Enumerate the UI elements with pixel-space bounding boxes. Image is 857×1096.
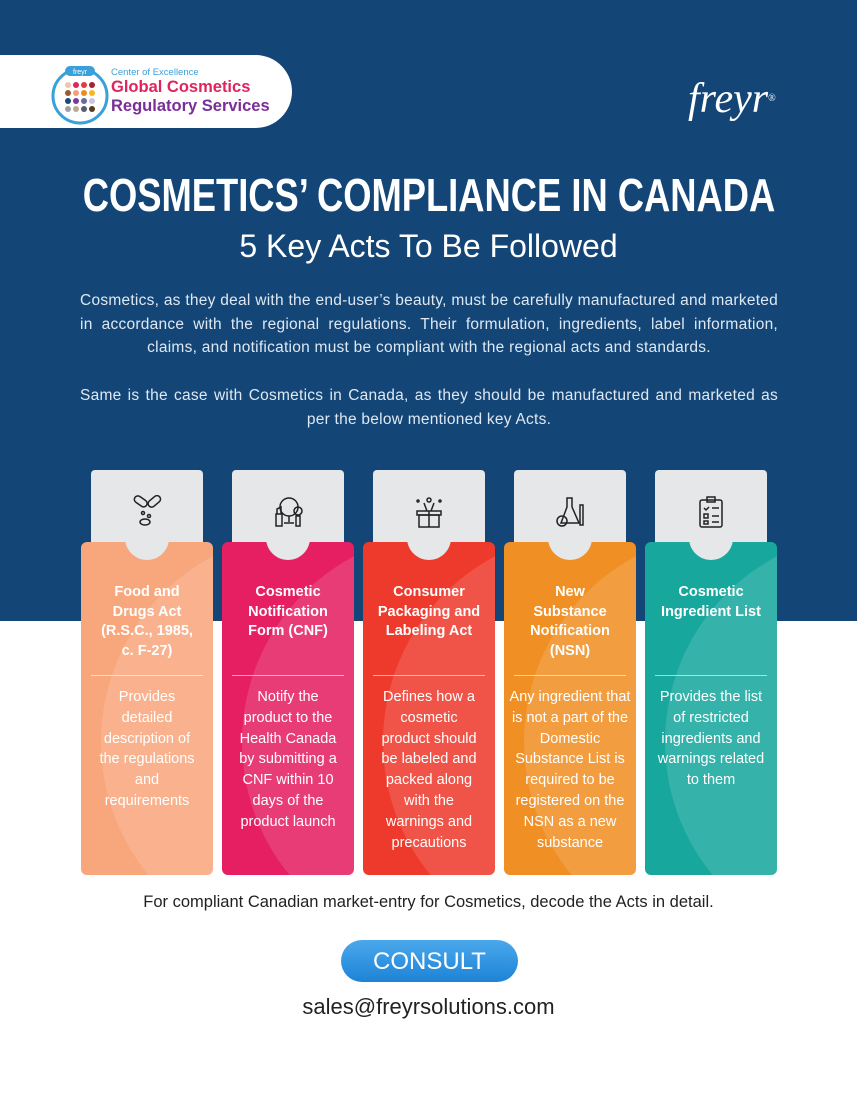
consult button: CONSULT (373, 948, 486, 975)
card 4: New Substance Notification (NSN) (530, 584, 610, 659)
card 4: Any ingredient that is not a part of the Domestic Substance List is required to be registered on the NSN as a new substance (510, 689, 630, 851)
email: sales@freyrsolutions.com (302, 994, 555, 1019)
card 1 (81, 542, 213, 875)
freyr logo: freyr® (688, 76, 776, 122)
card 2 (222, 542, 354, 875)
card 2: Notify the product to the Health Canada by submitting a CNF within 10 days of the product launch (239, 689, 337, 830)
icon: pills (134, 495, 162, 526)
icon: box (416, 497, 442, 528)
subtitle: 5 Key Acts To Be Followed (239, 228, 618, 264)
icon: dots logo (52, 66, 108, 124)
card 4 (504, 542, 636, 875)
icon: dots logo: freyr (73, 69, 88, 76)
icon: mirror lipstick (275, 497, 303, 527)
logo text: Center of Excellence (111, 67, 199, 78)
title: COSMETICS’ COMPLIANCE IN CANADA (82, 169, 775, 221)
tabs (91, 470, 767, 542)
logo text: Regulatory Services (111, 97, 270, 115)
icon: flasks (556, 497, 584, 527)
intro text: Cosmetics, as they deal with the end-user’s beauty, must be carefully manufactured and marketed in accordance with the regional regulations. Their formulation, ingredients, label information, claims, and notification must be compliant with the regional acts and standards. (80, 292, 778, 356)
card 5: Cosmetic Ingredient List (661, 584, 761, 620)
icon: clipboard (699, 496, 723, 528)
card 1: Food and Drugs Act (R.S.C., 1985, c. F-27) (101, 584, 193, 659)
card 2: Cosmetic Notification Form (CNF) (248, 584, 328, 639)
card 3: Defines how a cosmetic product should be labeled and packed along with the warnings and precautions (381, 689, 477, 851)
intro text 2: Same is the case with Cosmetics in Canada, as they should be manufactured and marketed as per the below mentioned key Acts. (80, 387, 778, 428)
card 1: Provides detailed description of the regulations and requirements (99, 689, 195, 809)
logo pill (0, 55, 292, 128)
logo text (111, 67, 270, 115)
card 3 (363, 542, 495, 875)
card 5: Provides the list of restricted ingredients and warnings related to them (658, 689, 764, 788)
consult button (341, 940, 518, 982)
logo text: Global Cosmetics (111, 78, 250, 96)
card 3: Consumer Packaging and Labeling Act (378, 584, 480, 639)
footer text: For compliant Canadian market-entry for Cosmetics, decode the Acts in detail. (143, 893, 714, 911)
card 5 (645, 542, 777, 875)
